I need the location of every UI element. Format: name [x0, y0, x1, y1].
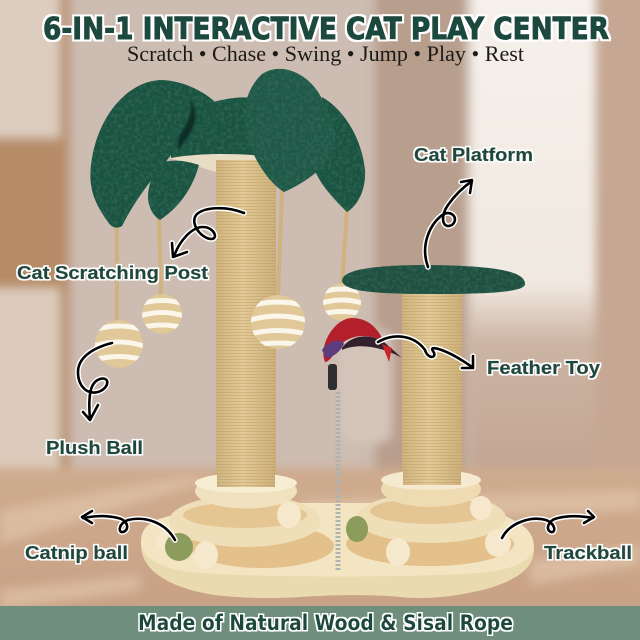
- arrow: feather toy: [378, 336, 473, 368]
- arrow: cat scratching post: [172, 208, 244, 257]
- label: cat platform: Cat Platform: [414, 145, 533, 165]
- wooden base board: [141, 503, 534, 598]
- footer banner: [0, 606, 640, 640]
- arrow: cat platform: [425, 180, 472, 267]
- label: plush ball: Plush Ball: [46, 438, 143, 458]
- arrow: trackball: [502, 511, 594, 538]
- underside disc of canopy: [170, 153, 338, 172]
- label: trackball: Trackball: [544, 543, 632, 563]
- centre leaf front: [244, 69, 336, 192]
- icon: feather toy: [322, 318, 402, 390]
- label: catnip ball: Catnip ball: [25, 543, 128, 563]
- footer text: Made of Natural Wood & Sisal Rope: [138, 611, 513, 635]
- label: cat scratching post: Cat Scratching Post: [17, 263, 208, 283]
- icon: catnip balls: [165, 516, 368, 561]
- label: feather toy: Feather Toy: [487, 358, 600, 378]
- icon: wooden trackballs: [156, 496, 511, 569]
- leaf crease shadow: [178, 100, 196, 150]
- left sisal scratching post: [216, 155, 276, 490]
- left tiered wooden track: [169, 460, 321, 547]
- right tiered wooden track: [356, 458, 506, 543]
- arrow: plush ball: [78, 343, 112, 420]
- hanging ropes: [117, 190, 347, 322]
- icon: sisal balls: [94, 283, 362, 368]
- cat platform top: [342, 265, 525, 294]
- green plush palm canopy: [90, 80, 365, 228]
- left post top over disc: [216, 160, 276, 200]
- right sisal post: [402, 290, 462, 486]
- subtitle: Scratch • Chase • Swing • Jump • Play • Rest: [127, 41, 524, 66]
- arrow: catnip ball: [82, 511, 175, 540]
- spring wire: [336, 392, 340, 572]
